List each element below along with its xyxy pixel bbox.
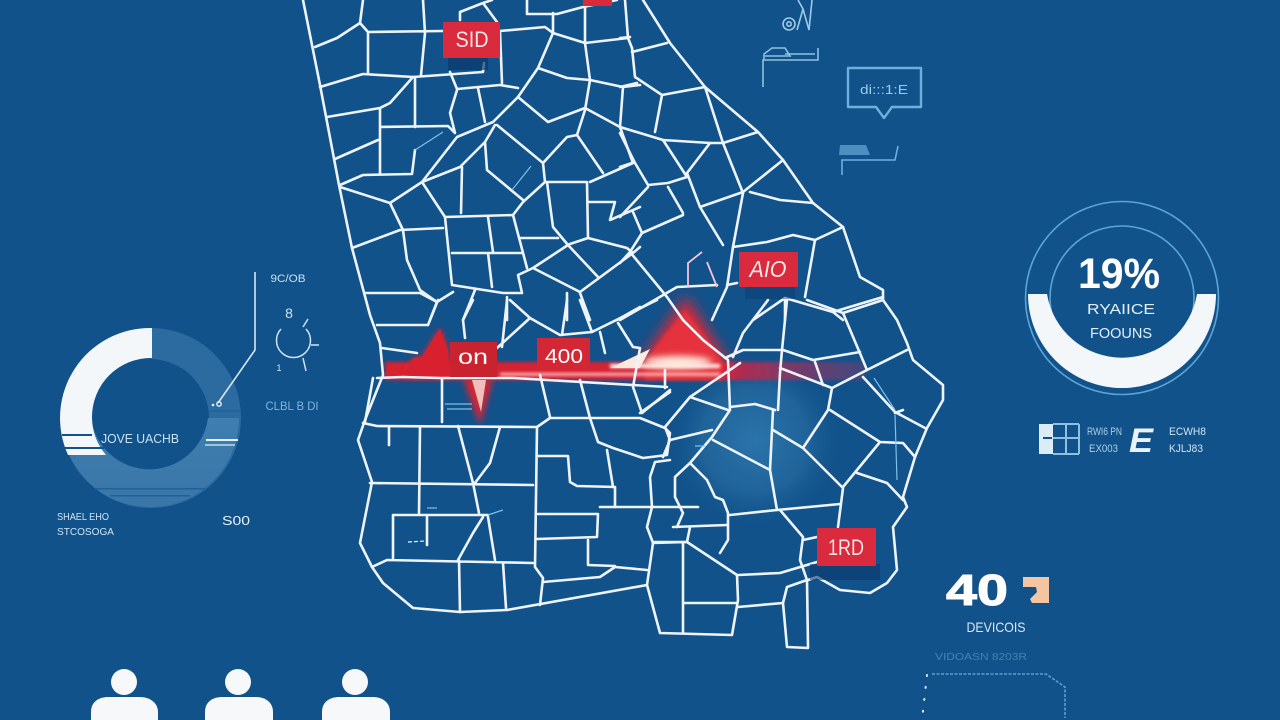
icon: bracket tray bbox=[763, 48, 818, 87]
legend text one bbox=[1087, 426, 1122, 455]
legend text two: KJLJ83 bbox=[1169, 443, 1203, 455]
thin accent lines on the map bbox=[408, 132, 897, 542]
gauge white arc bbox=[1028, 294, 1216, 388]
dotted bracket bbox=[922, 674, 1065, 720]
map label: 1RD bbox=[810, 528, 880, 580]
gauge caption: RYAIICE bbox=[1087, 301, 1155, 318]
gauge rings bbox=[1026, 202, 1218, 394]
legend text one: RWI6 PN bbox=[1087, 426, 1122, 438]
top right outline icons bbox=[763, 0, 921, 175]
left label: below dial: CLBL B DI bbox=[266, 399, 318, 413]
left caption: SHAEL EHO bbox=[57, 511, 109, 523]
map label: TON bbox=[450, 342, 497, 377]
donut stripes bbox=[62, 410, 240, 496]
icon: bar block bbox=[1039, 424, 1079, 454]
people icons bbox=[91, 669, 390, 720]
legend text two bbox=[1169, 426, 1206, 455]
map label: SID bbox=[443, 22, 500, 70]
map label: 400 bbox=[537, 338, 590, 370]
red glow corridor bbox=[385, 296, 865, 425]
left label: top: 9C/OB bbox=[270, 273, 306, 285]
stat: 40 devices bbox=[922, 566, 1065, 720]
donut center text: JOVE UACHB bbox=[101, 431, 179, 446]
person two bbox=[205, 669, 273, 720]
map label: SID: SID bbox=[456, 27, 488, 52]
map label: TON: on bbox=[458, 346, 488, 369]
callout box bbox=[848, 68, 921, 118]
highlighted inland region bbox=[665, 350, 845, 530]
person one bbox=[91, 669, 158, 720]
icon: clock dial: 1 bbox=[276, 363, 282, 373]
icon: E glyph: E bbox=[1129, 422, 1154, 460]
left caption: STCOSOGA bbox=[57, 526, 114, 538]
panel: left donut chart bbox=[60, 328, 241, 508]
stat faint text: VIDOASN 8203R bbox=[935, 651, 1027, 663]
left caption bbox=[57, 511, 114, 538]
map label: AIO bbox=[739, 252, 798, 299]
map label: AIO: AIO bbox=[748, 256, 787, 282]
panel: right gauge bbox=[1026, 202, 1218, 394]
icon: clock dial bbox=[276, 305, 319, 373]
gauge value: 19% bbox=[1078, 250, 1160, 298]
legend below gauge bbox=[1039, 422, 1206, 460]
icon: shaded bracket bbox=[839, 145, 898, 175]
map label: 1RD: 1RD bbox=[828, 535, 864, 560]
legend text two: ECWH8 bbox=[1169, 426, 1206, 438]
legend text one: EX003 bbox=[1089, 443, 1118, 455]
map label: 400: 400 bbox=[545, 346, 583, 368]
panel: right gauge: FOOUNS bbox=[1090, 325, 1152, 342]
person three bbox=[322, 669, 390, 720]
icon: figure with ball bbox=[783, 0, 812, 30]
stat value: 40 bbox=[946, 566, 1008, 615]
left value: S00 bbox=[222, 513, 250, 528]
pink highlight lines bbox=[688, 252, 717, 287]
county lines bbox=[303, 0, 943, 648]
icon: clock dial: 8 bbox=[285, 305, 293, 321]
stat caption: DEVICOIS bbox=[966, 619, 1026, 635]
leader line bbox=[212, 272, 255, 406]
donut blue ring bbox=[61, 328, 241, 508]
map label: top cropped bbox=[583, 0, 612, 6]
icon: fist bbox=[1023, 577, 1049, 603]
donut white segment bbox=[60, 328, 152, 455]
callout box: di:::1:E bbox=[860, 82, 908, 97]
map: county outline bbox=[303, 0, 943, 648]
